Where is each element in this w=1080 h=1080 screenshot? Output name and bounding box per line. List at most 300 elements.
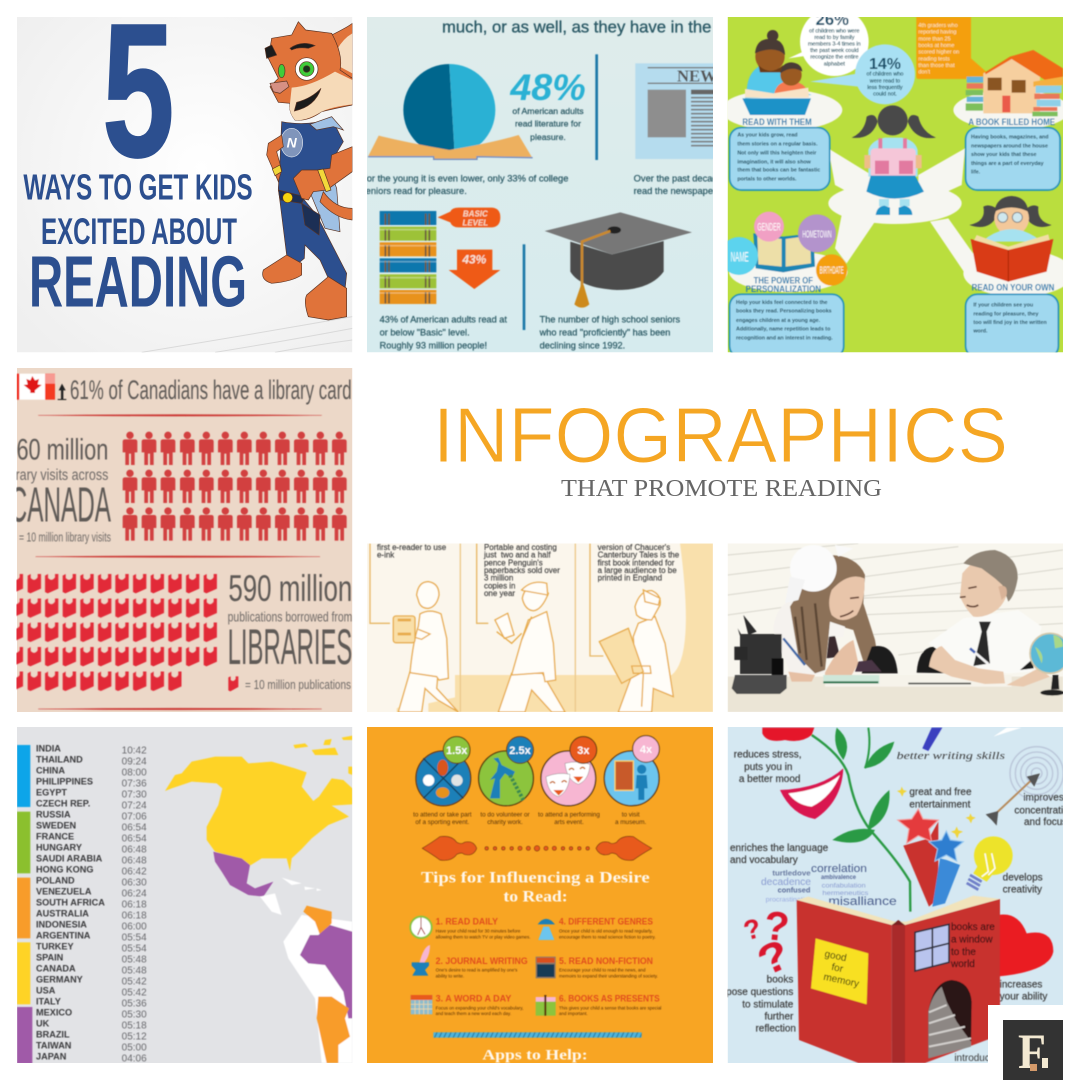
text: below basic [380,315,507,350]
callout: 4th graders: scored higher on [918,50,959,56]
tip 6: This gives your child a sense that books are special [559,1005,661,1010]
callout: 26 percent bubble [788,7,869,76]
text box: read with them: portals to other worlds. [737,177,797,183]
panel: 5 ways to get kids excited about reading [17,0,352,352]
text box: read with them [730,128,830,190]
illustration: doorway and stairs [928,980,972,1058]
list: countries: EGYPT [36,788,67,798]
callout: 26 percent bubble: the past week could [810,48,859,54]
text: e-reader [377,543,447,560]
list: hours: 05:54 [122,944,147,955]
icon: target and arrow [986,747,1063,826]
tip 5: Encourage your child to read the news, and [559,968,646,973]
text: books are a window: world [950,959,975,970]
list: countries: BRAZIL [36,1030,70,1040]
stat: 360 million visits [3,433,111,545]
heading: tips: Tips for Influencing a Desire [421,869,650,886]
list: hours: 06:30 [122,878,147,889]
icon: personalization book and circles [720,212,847,286]
text box: a book filled home: life. [971,170,981,176]
text: enriches language: and vocabulary [730,855,798,866]
legend: colour bands [17,745,32,1064]
text: introduces: introduces [954,1053,1000,1064]
text box: read with them: them that books can be fantastic [737,168,820,174]
figure: medieval person with book [599,590,673,712]
panel: American reading statistics [361,17,726,352]
panel: Canadian library statistics [3,368,352,712]
icon: museum circle: 4x [640,744,653,756]
icon: newspaper [635,63,713,160]
word cloud: procrastination [766,897,813,904]
callout: 26 percent bubble: read to by family [814,35,855,41]
text box: power of personalization: recognition and an interest in reading. [736,335,833,341]
icon: smiling lips [780,768,843,819]
text box: read on your own: too will find joy in the written [973,320,1047,326]
list: hours: 06:18 [122,900,147,911]
text: Penguin paperbacks [483,543,560,598]
icon: parent and child reading [742,30,812,115]
icon: sporting event circle: 1.5x [446,745,468,757]
text: high school seniors: declining since 1992. [540,340,625,350]
list: hours: 05:36 [122,999,147,1010]
callout: 14 percent bubble: of children who [867,72,903,78]
list: countries: MEXICO [36,1008,72,1018]
stat caption [512,106,584,142]
panel: Canadian library statistics: CANADA [10,478,111,533]
icon: house and books [966,50,1063,116]
text: below basic: 43% of American adults read at [380,315,507,325]
illustration: globe [1030,633,1070,696]
callout: 4th graders: don't [918,70,931,76]
captions: activities: charity work. [487,819,523,826]
callout: 14 percent bubble: less frequently [867,85,903,91]
text: newspaper [634,174,723,196]
top heading fragment: much, or as well, as they have in the [442,17,711,36]
title: Infographics: INFOGRAPHICS [433,391,1008,479]
icon: book stack [380,211,436,304]
icon: light bulb [967,836,1013,890]
captions: activities: a museum. [615,819,647,826]
list: hours: 06:54 [122,823,147,834]
list: countries: CZECH REP. [36,799,90,809]
list: hours: 05:12 [122,1032,147,1043]
tip 1: Have your child read for 30 minutes before [436,928,521,933]
list: countries: SAUDI ARABIA [36,854,103,864]
tip 2 [412,945,528,978]
callout: 26 percent bubble: members 3-4 times in [808,42,861,48]
text: LIBRARIES [228,619,352,675]
tip 4: encourage them to read science fiction to poetry. [559,934,656,939]
icon: volunteer circle [479,737,533,806]
list: countries: INDIA [36,744,61,754]
callout: 4th graders: 4th graders who [918,23,958,29]
text: improves concentration [1014,792,1074,828]
list: hours: 06:24 [122,889,147,900]
panel: benefits of reading book illustration [726,727,1074,1064]
chart: people pictogram [123,432,347,541]
list: countries [36,744,105,1061]
text: develops creativity: creativity [1003,885,1042,896]
logo badge: F [1018,1023,1046,1079]
text: Canterbury Tales: version of Chaucer's [598,543,670,552]
sticky note: good for memory: good [824,949,848,964]
text: reduces stress: reduces stress, [734,749,802,760]
arrow: 43 percent [449,250,500,289]
list: hours: 07:30 [122,790,147,801]
text: great and free entertainment: great and free [909,787,972,798]
list: hours: 07:24 [122,801,147,812]
captions: activities [413,812,647,826]
icon: heart [997,915,1053,977]
tip 3: Focus on expanding your child's vocabulary, [436,1005,523,1010]
list: countries: HONG KONG [36,865,93,875]
icon: pen [922,728,942,751]
heading line 1: WAYS TO GET KIDS [23,166,253,207]
text: develops creativity [1003,873,1043,896]
captions: activities: arts event. [554,819,584,826]
callout: 4th graders: reading tests [918,56,950,62]
text box: read with them: them stories on a regular basis. [737,142,818,148]
list: hours: 06:54 [122,834,147,845]
word cloud: ambivalence [821,875,857,881]
tip 4: Once your child is old enough to read regularly, [559,928,653,933]
text: better writing skills: better writing skills [897,751,1005,762]
stat: 590 million publications [228,567,352,675]
callout: 4th graders: books at home [918,43,954,49]
text box: a book filled home: show your kids that these [971,152,1036,158]
text: Penguin paperbacks: just two and a half [483,551,551,560]
white path shapes [721,89,1073,297]
list: countries: THAILAND [36,755,83,765]
callout: 4th graders: than those that [918,63,955,69]
logo badge [988,1005,1080,1080]
text box: power of personalization: Additionally, name repetition leads to [736,327,831,333]
captions: activities: to attend a performing [538,812,600,819]
icon: girl reading [969,196,1053,282]
list: countries: PHILIPPINES [36,777,93,787]
list: countries: SPAIN [36,953,63,963]
icon: cat mascot [263,22,352,320]
list: countries: RUSSIA [36,810,71,820]
text box: power of personalization: engages children at a young age. [736,318,821,324]
text box: power of personalization [730,294,844,358]
text: books are a window [950,922,995,970]
stat: 360 million visits: = 10 million library visits [19,531,111,545]
tip 5: 5. READ NON-FICTION [559,956,653,966]
text box: power of personalization: Help your kids feel connected to the [736,300,828,306]
list: countries: VENEZUELA [36,887,92,897]
list: countries: SOUTH AFRICA [36,898,105,908]
text: books pose questions: books [767,974,793,985]
text: Penguin paperbacks: pence Penguin's [484,558,543,567]
table [728,677,1063,712]
icon: newspaper: NEWS [677,66,726,85]
text: below basic: Roughly 93 million people! [380,340,487,350]
list: hours: 06:42 [122,867,147,878]
heading: apps to help: Apps to Help: [482,1047,588,1063]
list: hours: 06:18 [122,911,147,922]
map: the Americas [165,736,352,1063]
tip 2: 2. JOURNAL WRITING [436,956,528,966]
list: countries: POLAND [36,876,75,886]
sticky note: good for memory: for [830,962,845,975]
text: Penguin paperbacks: one year [484,589,515,598]
text box: read with them: As your kids grow, read [737,133,798,139]
text: college seniors: For the young it is even lower, only 33% of college [361,174,568,184]
list: countries: CANADA [36,964,76,974]
list: countries: HUNGARY [36,843,82,853]
heading: a book filled home: A BOOK FILLED HOME [968,117,1055,127]
text: high school seniors [539,315,681,350]
heading: the power of personalization: PERSONALIZATION [746,284,821,294]
icon: sporting event circle [416,737,471,806]
text: increases your ability [1000,979,1047,1003]
text: great and free entertainment: entertainment [909,800,971,811]
icon: question marks: ? [762,902,791,950]
text: reduces stress: puts you in [744,762,792,773]
captions: activities: of a sporting event. [415,819,469,826]
text box: a book filled home [966,128,1060,190]
text box: read on your own: If your children see you [973,303,1033,309]
text box: a book filled home: things are a part of everyday [971,161,1044,167]
tip 1: 1. READ DAILY [436,916,498,926]
striped divider [433,1032,642,1038]
icon: personalization book and circles: GENDER [757,221,781,233]
callout: 14 percent bubble: could not. [873,91,897,97]
icon: performing arts circle [541,737,597,806]
list: hours: 07:06 [122,812,147,823]
text box: a book filled home: newspapers around the house [971,143,1048,149]
callout: 26 percent bubble: recognize the entire [810,55,858,61]
list: hours: 07:36 [122,779,147,790]
list: hours: 05:18 [122,1021,147,1032]
icon: personalization book and circles: HOMETOWN [802,229,832,240]
tip 5 [536,956,658,978]
panel: ways to encourage reading [720,7,1073,358]
tip 3: and teach them a new word each day. [436,1011,511,1016]
list: hours: 09:24 [122,757,147,768]
icon: Canadian flag [17,374,66,400]
list: countries: TAIWAN [36,1041,71,1051]
tip 3 [411,994,523,1016]
text box: read on your own: word. [972,329,988,335]
subtitle: that promote reading: THAT PROMOTE READING [561,476,882,502]
heading: the power of personalization [746,276,821,294]
text: enriches language: enriches the language [730,843,829,854]
callout: basic level: BASIC [463,210,488,219]
text: books pose questions: to stimulate [742,999,794,1010]
tip 5: memoirs to expand their understanding of society. [559,973,658,978]
text: e-reader: first e-reader to use [377,543,447,552]
text: reduces stress [734,749,802,785]
icon: volunteer circle: 2.5x [509,745,532,757]
tip 6: and important. [559,1011,588,1016]
legend: publications [228,676,351,692]
text: books are a window: books are [951,922,995,933]
text: increases your ability: your ability [1000,992,1047,1003]
sticky note: good for memory [811,938,868,1004]
list: hours: 10:42 [122,746,147,757]
list: countries: GERMANY [36,975,83,985]
text: Penguin paperbacks: Portable and costing [484,543,557,552]
list: countries: SWEDEN [36,821,76,831]
text box: read with them: Not only will this heighten their [737,150,816,156]
tip 3: 3. A WORD A DAY [436,994,511,1004]
word cloud [761,863,897,908]
text: college seniors: seniors read for pleasure. [361,186,467,196]
list: countries: TURKEY [36,942,74,952]
heading line 3: READING [29,243,247,323]
list: hours: 05:42 [122,988,147,999]
stat caption: read literature for [515,119,581,129]
list: countries: AUSTRALIA [36,909,89,919]
word cloud: turtledove [772,869,811,878]
list: countries: UK [36,1019,50,1029]
figure: person with paperback [495,582,565,712]
text: Penguin paperbacks: copies in [484,581,516,590]
illustration: red book [797,896,1000,1063]
callout: 14 percent bubble: 14% [869,56,901,73]
tip 1 [410,916,531,939]
tip 2: One's desire to read is amplified by one's [436,968,518,973]
panel: history of books timeline [367,543,713,712]
stat: 590 million publications: publications borrowed from [228,609,352,625]
list: hours: 05:42 [122,977,147,988]
text: books pose questions: pose questions [726,987,793,998]
heading: read on your own: READ ON YOUR OWN [972,282,1055,292]
text: high school seniors: who read "proficiently" has been [539,328,670,338]
tip 1: allowing them to watch TV or play video games. [436,934,531,939]
text: improves concentration: and focus [1024,817,1067,828]
callout: 4th graders [916,17,992,79]
text: books pose questions: reflection [755,1024,796,1035]
word cloud: confused [778,886,811,895]
list: hours: 04:06 [122,1053,147,1064]
text: e-reader: e-ink [377,551,394,560]
list: countries: CHINA [36,766,65,776]
chart: pie over open book [368,64,533,159]
callout: 26 percent bubble: of children who were [809,28,859,34]
panel: tips for influencing a desire to read [367,727,713,1063]
text: newspaper: read the newspaper [634,186,716,196]
callout: 14 percent bubble [810,44,915,104]
callout: 26 percent bubble: alphabet [824,61,845,67]
heading: read with them: READ WITH THEM [742,117,812,127]
text: Canterbury Tales: printed in England [598,574,662,583]
heading: 61 percent of Canadians: 61% of Canadians have a library card [70,375,352,405]
list: countries: ARGENTINA [36,931,91,941]
icon: question marks: ? [740,912,764,946]
heading: tips [421,869,650,906]
text box: power of personalization: books they read. Personalizing books [736,309,832,315]
word cloud: decadence [761,877,811,888]
list: hours: 06:48 [122,845,147,856]
captions: activities: to attend or take part [413,812,472,819]
list: hours: 05:48 [122,955,147,966]
arrow: 43 percent: 43% [461,252,487,266]
list: hours [122,746,147,1064]
list: countries: USA [36,986,56,996]
word cloud: hermeneutics [822,890,869,897]
text box: read on your own: reading for pleasure, they [973,311,1039,317]
tip 4 [538,916,656,940]
tip 6: 6. BOOKS AS PRESENTS [559,994,660,1004]
word cloud: misalliance [828,895,897,908]
text: enriches language [730,843,829,866]
text: improves concentration: improves [1023,792,1064,803]
legend: publications: = 10 million publications [245,678,351,692]
stat: 590 million publications: 590 million [228,567,352,609]
timeline frames [370,543,603,656]
list: hours: 08:00 [122,768,147,779]
illustration: desk organizer [732,615,787,694]
figure: person with e-reader [393,582,458,712]
list: hours: 06:48 [122,856,147,867]
callout: basic level [438,208,500,227]
callout: 14 percent bubble: were read to [869,79,900,85]
illustration: vine and leaves [812,728,910,912]
ornament divider [422,836,652,860]
text: improves concentration: concentration [1014,805,1074,816]
stat caption: pleasure. [530,132,566,142]
icon: cat mascot: N [287,135,298,151]
list: hours: 05:48 [122,966,147,977]
callout: 4th graders: reported having [918,30,956,36]
text: Canterbury Tales: Canterbury Tales is the [598,551,680,560]
text box: read with them: imagination, it will also show [737,159,812,165]
text: Penguin paperbacks: 3 million [484,574,513,583]
tip 6 [536,994,661,1016]
callout: 26 percent bubble: 26% [816,10,849,29]
list: countries: INDONESIA [36,920,87,930]
text: books are a window: a window [951,934,993,945]
icon: rose [762,728,814,741]
icon: personalization book and circles: NAME [731,249,749,265]
illustration: window [915,924,949,971]
word cloud: correlation [811,863,867,875]
illustration: boy [908,550,1050,687]
captions: activities: to visit [622,812,640,819]
chart: publications pictogram [10,574,217,691]
word cloud: confabulation [822,882,866,889]
stat: 360 million visits: library visits across [3,467,109,484]
text: Canterbury Tales [598,543,680,583]
icon: museum circle [604,736,659,806]
text box: a book filled home: Having books, magazines, and [971,134,1049,140]
text: newspaper: Over the past decade [634,174,723,184]
illustration: girl [773,545,898,684]
text: high school seniors: The number of high school seniors [540,315,681,325]
stat 48%: 48% [509,66,586,108]
text: Canterbury Tales: first book intended for [598,558,675,567]
text: develops creativity: develops [1003,873,1043,884]
panel: ways to encourage reading: BIRTHDATE [820,266,844,277]
list: countries: FRANCE [36,832,74,842]
callout: basic level: LEVEL [462,218,488,227]
heading line 2: EXCITED ABOUT [41,211,237,252]
list: hours: 06:00 [122,922,147,933]
text: books pose questions: further [764,1011,794,1022]
list: hours: 05:30 [122,1010,147,1021]
icon: graduation cap [545,212,692,308]
sticky note: good for memory: memory [822,972,860,990]
stat: 360 million visits: 360 million [4,433,108,466]
icon: shooting stars [897,787,976,907]
text: Penguin paperbacks: paperbacks sold over [484,566,560,575]
text: increases your ability: increases [1000,979,1042,990]
icon: question marks: ? [750,930,797,985]
text: below basic: or below "Basic" level. [380,328,470,338]
